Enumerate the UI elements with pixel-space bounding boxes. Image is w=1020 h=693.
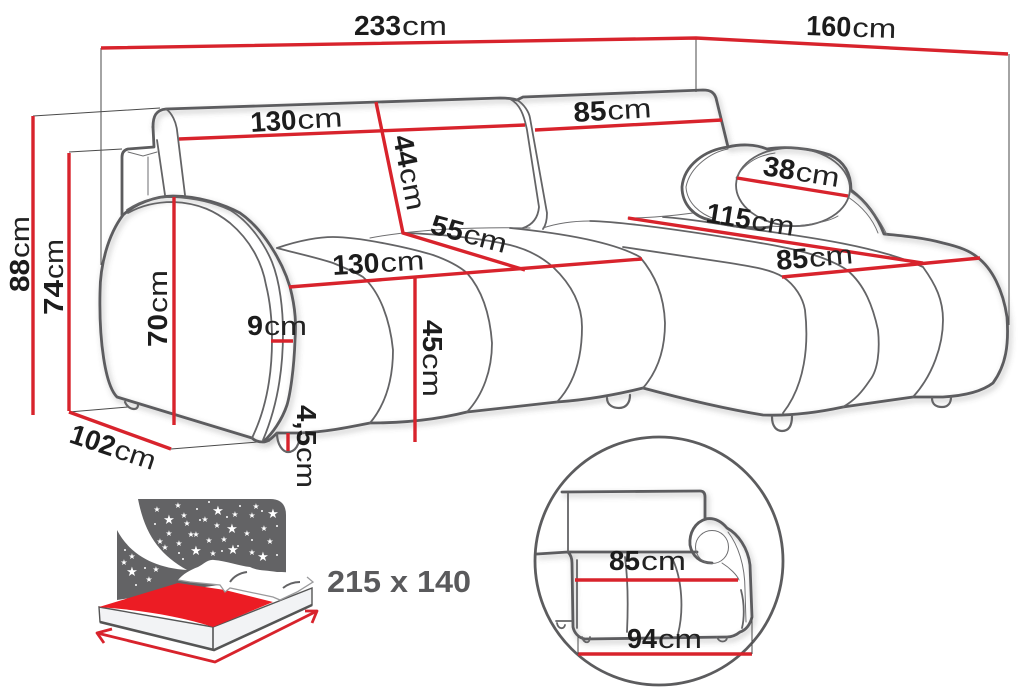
bed icon [97,499,317,662]
label: 44cm [387,132,432,213]
backrest seam [510,99,547,229]
label: 38cm: 38 [761,150,798,186]
stars: ★ [248,511,256,520]
label: 55cm [427,209,511,259]
label: 74cm: cm [39,239,69,279]
stars: ★ [152,565,160,574]
seat cushions [277,228,665,423]
label: 44cm: 44 [387,132,424,170]
bed pillows [178,560,313,600]
stars: ★ [145,575,153,584]
label: 94cm inset [627,623,702,654]
stars: ★ [260,524,268,533]
stars: ★ [266,537,274,546]
label: 74cm [38,239,69,315]
chaise cushions [543,213,943,413]
stars: ★ [161,543,169,552]
label: 130cm seat: cm [379,245,425,278]
stars: ★ [209,549,217,558]
label: 55cm: 55 [427,209,467,247]
feet [125,395,951,452]
stars: ★ [213,521,221,530]
stars: ★ [192,530,200,539]
stars: ★ [128,552,136,561]
label: 94cm inset: cm [658,624,702,654]
label: 94cm inset: 94 [627,623,657,654]
extension guide lines [33,38,1009,449]
label: 88cm [4,216,35,292]
label: 233cm [354,10,447,41]
armrest inner arcs [127,197,283,440]
stars [120,501,279,586]
label: 74cm: 74 [38,280,69,315]
label: 9cm: 9 [247,310,263,341]
stars: ★ [227,542,239,557]
label: 102cm: cm [111,434,160,476]
inset sofa details [556,493,746,642]
label: 55cm: cm [460,219,511,259]
label: 85cm backrest: 85 [572,95,607,128]
label: 44cm: cm [393,165,431,213]
label: 85cm chaise: cm [808,239,854,273]
stars: ★ [243,529,251,538]
label: 85cm inset [609,545,686,576]
stars: ★ [175,539,183,548]
label: 130cm seat: 130 [331,247,380,281]
label: 160cm: cm [852,13,897,44]
stars: ★ [174,501,182,510]
stars: ★ [190,543,202,558]
label: 4,5cm: 4,5 [291,405,322,446]
label: 4,5cm [291,405,322,488]
label: 88cm: cm [5,216,35,258]
label: 38cm: cm [794,156,842,193]
label: 45cm: cm [417,353,447,397]
label: 85cm backrest: cm [606,93,652,126]
label: 85cm backrest [572,92,652,128]
inset circle: side view [535,437,783,685]
stars: ★ [156,537,164,546]
label: 45cm [417,320,448,397]
inset sofa outline [537,491,752,639]
stars: ★ [205,536,213,545]
stars: ★ [220,535,228,544]
label: 85cm inset: cm [641,546,686,576]
label: 130cm backrest [249,101,343,138]
stars: ★ [163,512,175,527]
label: 130cm seat [331,244,425,281]
stars: ★ [165,529,173,538]
label: 115cm: cm [749,205,797,242]
mattress [99,583,312,650]
label: 70cm: cm [143,270,173,313]
label: 70cm [142,270,173,347]
stars: ★ [183,519,191,528]
label: 233cm: 233 [354,10,401,41]
label: 102cm [66,418,160,476]
label: 115cm: 115 [704,197,753,235]
label: 88cm: 88 [4,259,35,292]
night sky with curtain [117,499,286,600]
label: 85cm inset: 85 [609,545,640,576]
stars: ★ [120,558,128,567]
stars: ★ [252,502,260,511]
stars: ★ [226,521,238,536]
label: 38cm [761,150,842,193]
label: 160cm: 160 [806,10,852,43]
label: bed size 215 x 140: 215 x 140 [327,564,471,599]
label: 130cm backrest: cm [296,102,343,135]
pillows [682,145,887,235]
stars: ★ [180,511,188,520]
label: 160cm [806,10,897,44]
label: 102cm: 102 [66,418,120,462]
label: 45cm: 45 [417,320,448,352]
stars: ★ [257,549,269,564]
label: 9cm: cm [264,311,307,341]
stars: ★ [153,505,161,514]
label: 4,5cm: cm [291,447,321,488]
stars: ★ [187,530,195,539]
sofa outer outline [100,90,1008,442]
stars: ★ [231,510,239,519]
inset red lines [575,580,752,654]
label: 233cm: cm [402,11,447,41]
label: 9cm [247,310,307,341]
sofa drawing [100,90,1008,452]
stars: ★ [201,515,209,524]
red dimension lines [33,38,1008,451]
stars: ★ [212,503,224,518]
stars: ★ [248,548,256,557]
label: 85cm chaise [775,238,854,276]
label: 130cm backrest: 130 [249,104,297,138]
label: 85cm chaise: 85 [775,242,809,276]
label: 70cm: 70 [142,314,173,347]
stars: ★ [267,506,279,521]
mattress arrows [97,611,317,662]
label: 115cm [704,197,797,242]
backrest left arm [122,109,185,215]
stars: ★ [126,564,138,579]
